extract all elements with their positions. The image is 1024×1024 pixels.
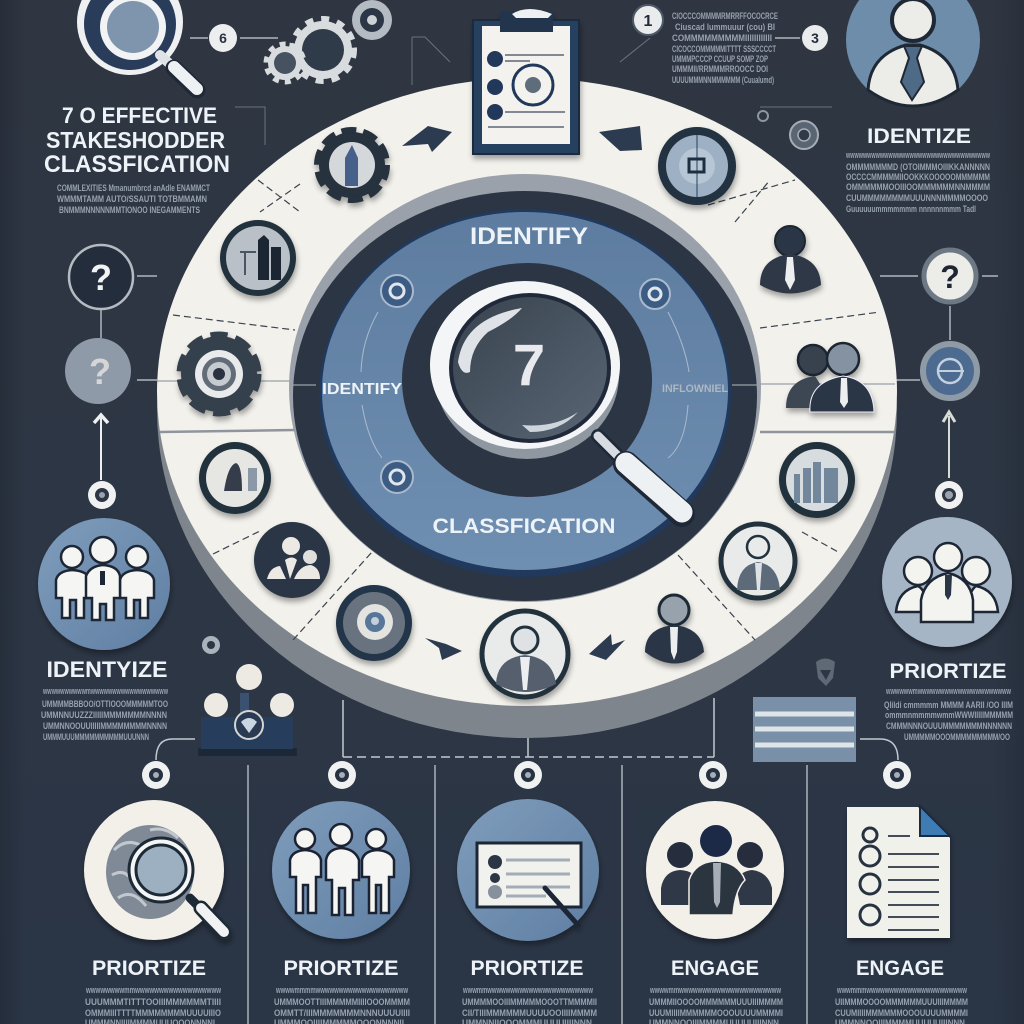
top-left numbered dot (209, 24, 237, 52)
right people circle (882, 517, 1012, 647)
top-center description text: UUUUMMMNNMMMMMM (Cuualumd) (672, 75, 774, 86)
column 1 label: PRIORTIZE (92, 957, 206, 980)
numeral: 7 (513, 333, 545, 398)
ring node: person dark (760, 226, 821, 294)
blue disc (319, 209, 731, 577)
ring side (157, 82, 897, 738)
column 5 text: UIIMMMOOOOMMMMMMUUUIIIMMMM (835, 997, 968, 1008)
ring node: buildings light (779, 442, 855, 518)
title description: WMMMTAMM AUTO/SSAUTI TOTBMMAMN (57, 194, 207, 205)
left people circle (38, 518, 170, 650)
ring dividers (157, 180, 895, 640)
right blue swirl circle (923, 344, 977, 398)
ring node: blue target (658, 127, 736, 205)
ring node: gear (317, 130, 387, 200)
label: identyize left: IDENTYIZE (46, 657, 168, 682)
column 3 text: wwwmmwwwwwwwwwwwwwwwwwwwwwww (462, 985, 593, 996)
top-center description text: CICOCCOMMMMMITTTT SSSCCCCT (672, 44, 776, 55)
ring node: person bottom right (645, 595, 704, 664)
column 2 text: OMMTT/IIIMMMMMMMNNNUUUUIIII (274, 1008, 410, 1019)
bottom small dots (142, 761, 911, 789)
lens highlight (458, 308, 522, 373)
central dark well (402, 263, 652, 497)
top-center description text: UMMMPCCCP CCUUP SOMP ZOP (672, 54, 768, 65)
inner rim (289, 174, 761, 602)
column 5 icon: document (847, 806, 950, 938)
top-left magnifier icon (77, 0, 197, 90)
right upward arrow (943, 412, 955, 478)
column 2 text (274, 985, 410, 1024)
title: 7 O EFFECTIVE (62, 103, 217, 128)
top-center description text: UMMMII/RRMMMRROOCC DOI (672, 64, 768, 75)
right small dot (935, 481, 963, 509)
title description: COMMLEXITIES Mmanumbrcd anAdle ENAMMCT (57, 183, 210, 194)
ring top surface (157, 78, 897, 706)
small icon: pin left (202, 636, 220, 654)
center text: classification: CLASSFICATION (432, 515, 616, 538)
column 1 text (85, 985, 221, 1024)
top-right numbered dots and text (633, 5, 828, 149)
text block: identize (845, 150, 990, 215)
column 1 text: wwwwwwwwmmwwwwwwwwwwwwwwwwww (85, 985, 221, 996)
column 1 icon: magnifier over brain (84, 800, 224, 940)
left question circle dark (69, 245, 133, 309)
column 2 icon: three figures (272, 801, 410, 939)
label: priortize right: PRIORTIZE (890, 660, 1006, 683)
top-center description text (672, 11, 778, 86)
ring node: person in circle right (721, 524, 795, 598)
central magnifier with 7 (430, 281, 682, 514)
inner dark well (293, 191, 757, 601)
small icon: pin right (816, 658, 835, 686)
title: STAKESHODDER (46, 127, 225, 153)
right question circle light (924, 250, 976, 302)
column 4 text (649, 985, 783, 1024)
column 4 label: ENGAGE (671, 957, 759, 980)
left question circle dark: ? (90, 257, 112, 298)
text block: identyize: UMMMUUUMMMMMMMMMMUUUNNN (43, 732, 149, 743)
ring node: person bottom center (482, 611, 568, 697)
text block: identyize (41, 686, 168, 743)
top-center description text: Ciuscad lummuuur (cou) BI (675, 22, 775, 33)
column 3 text (462, 985, 597, 1024)
top-right person circle (846, 0, 980, 107)
column 3 text: UMMMMOOIIIMMMMMOOOTTMMMMII (462, 997, 597, 1008)
ring node: group dark (254, 522, 330, 598)
small inner disc icons (361, 275, 689, 493)
left small dot (88, 481, 116, 509)
text block: identyize: UMMNNUUZZZIIIIIMMMMMMMNNNN (41, 710, 167, 721)
column 2 text: wwwwmmmmwwwwwwwwwwwwwwwwwwww (275, 985, 408, 996)
column 2 label: PRIORTIZE (284, 957, 398, 980)
magnifier body (435, 291, 619, 459)
column 3 icon: board with pen (457, 799, 599, 941)
magnifier handle (598, 436, 682, 514)
title (44, 103, 230, 178)
column 4 icon: group of three (646, 801, 784, 939)
ring node: large gear (180, 335, 258, 413)
top-center description text: COMMMMMMMMMIIIIIIIIIIII (672, 33, 772, 44)
right question circle light: ? (940, 259, 960, 295)
bar icon with tokens (198, 664, 297, 756)
text block: identyize: wwwwwwwwwwmwwwwwwwwwwwwwwwwww (42, 686, 168, 697)
top-left numbered dot: 6 (219, 30, 227, 46)
label: identize: IDENTIZE (867, 125, 971, 148)
text block: priortize right (884, 686, 1013, 743)
top gears (266, 0, 392, 82)
striped blue panel (753, 697, 856, 762)
column 1 text: UUUMMMTITTTOOIIIMMMMMMTIIII (85, 997, 221, 1008)
text block: identyize: UMMMMBBBOO/OTTIOOOMMMMMTOO (42, 699, 168, 710)
title description (57, 183, 210, 216)
column 2 text: UMMMOOTTIIIMMMMMIIIIOOOMMMM (274, 997, 410, 1008)
left upward arrow (94, 415, 108, 480)
ring node: eye disc (336, 585, 412, 661)
column 4 text: UMMMIIOOOOMMMMMMUUUIIIMMMM (649, 997, 783, 1008)
top-right numbered dots and text: 1 (644, 13, 653, 30)
column 1 text: OMMMIIITTTTMMMMMMMMUUUUIIIO (85, 1008, 221, 1019)
ring node: door icon (199, 442, 271, 514)
clipboard (473, 9, 579, 154)
column 3 label: PRIORTIZE (470, 957, 584, 980)
column 4 text: wwwwmmwwwwwwwwwwwwwwwwwwwwww (649, 985, 781, 996)
column 4 text: UUUMIIIIMMMMMMOOOUUUUMMMMI (649, 1008, 783, 1019)
column 3 text: CII/TIIIMMMMMMUUUUOOIIIIMMMM (462, 1008, 597, 1019)
column 5 text (835, 985, 968, 1024)
column 5 label: ENGAGE (856, 957, 944, 980)
left question circle grey: ? (89, 351, 111, 392)
title: CLASSFICATION (44, 151, 230, 178)
title description: BNMMMNNNNNMMTIONOO INEGAMMENTS (59, 205, 200, 216)
center text: information right: INFLOWNIEL (662, 383, 728, 395)
center text: identify top: IDENTIFY (470, 223, 588, 250)
ring node: two people (786, 343, 874, 412)
top-center description text: CIOCCCOMMMMRMRRFFOCOCRCE (672, 11, 778, 22)
main ring (157, 78, 897, 738)
column 5 text: CUUMIIIIMMMMMMOOOUUUUMMMMI (835, 1008, 968, 1019)
text block: identyize: UMMNNOOUUIIIIIMMMMMMMMNNNN (43, 721, 167, 732)
center text: identify left: IDENTIFY (322, 381, 402, 398)
top-right numbered dots and text: 3 (811, 30, 819, 46)
left question circle grey (65, 338, 131, 404)
ring node: buildings dark (220, 220, 296, 296)
ring arrows (402, 126, 642, 660)
